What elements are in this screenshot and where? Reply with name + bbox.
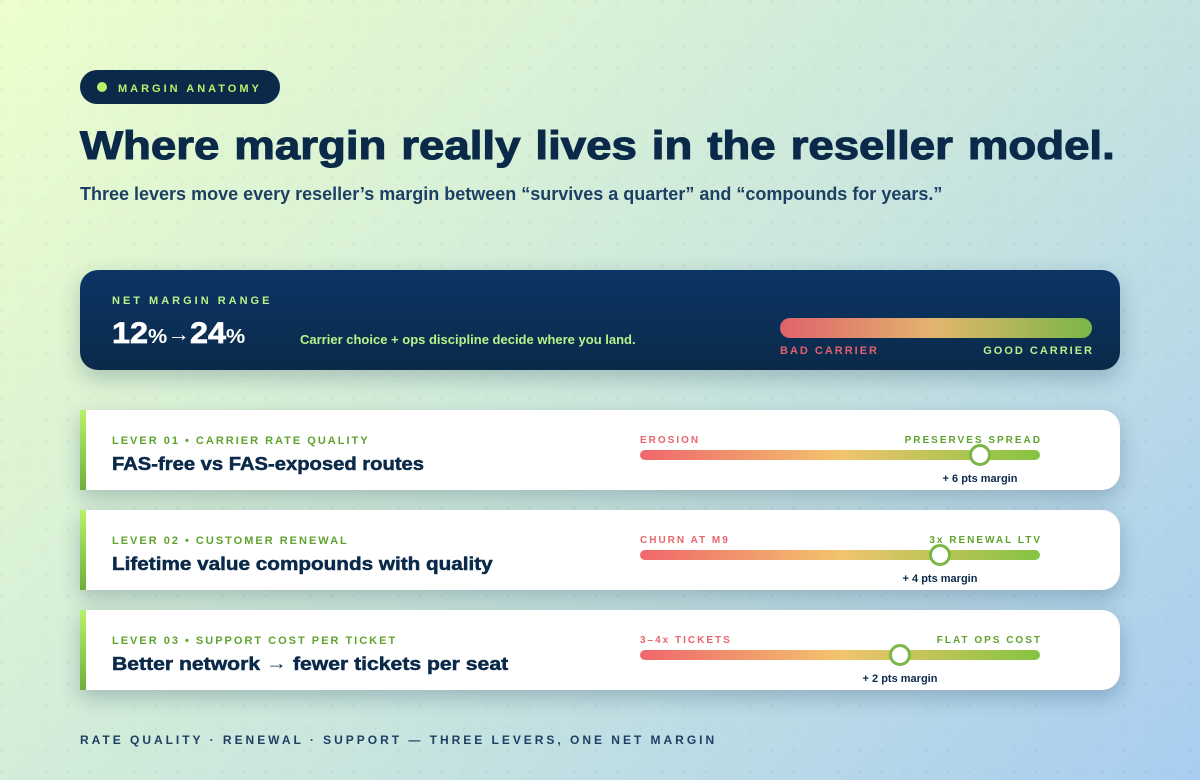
scale right label: 3x RENEWAL LTV xyxy=(929,535,1042,546)
margin gain: + 2 pts margin xyxy=(863,673,937,685)
slider track xyxy=(640,550,1040,560)
lever 03 label: LEVER 03 • SUPPORT COST PER TICKET xyxy=(112,635,397,647)
panel: lever 02 xyxy=(80,510,1120,590)
label: bad carrier: BAD CARRIER xyxy=(780,345,879,357)
badge: margin anatomy: MARGIN ANATOMY xyxy=(118,83,262,95)
subtitle: Three levers move every reseller’s margin between “survives a quarter” and “compounds for years.” xyxy=(80,184,942,204)
panel: lever 01 xyxy=(80,410,1120,490)
badge: margin anatomy xyxy=(80,70,280,104)
scale right label: FLAT OPS COST xyxy=(937,635,1042,646)
slider knob xyxy=(929,544,951,566)
gradient bar: carrier quality xyxy=(780,318,1092,338)
scale right label: PRESERVES SPREAD xyxy=(905,435,1042,446)
footer: RATE QUALITY · RENEWAL · SUPPORT — THREE LEVERS, ONE NET MARGIN xyxy=(80,733,717,747)
slider knob xyxy=(889,644,911,666)
label: good carrier: GOOD CARRIER xyxy=(983,345,1094,357)
slider knob xyxy=(969,444,991,466)
scale left label: CHURN AT M9 xyxy=(640,535,730,546)
panel: net margin range xyxy=(80,270,1120,370)
label: net margin range: NET MARGIN RANGE xyxy=(112,295,272,307)
slider track xyxy=(640,450,1040,460)
lever 02 label: LEVER 02 • CUSTOMER RENEWAL xyxy=(112,535,349,547)
range figure: 12%→24% xyxy=(112,317,245,350)
scale left label: EROSION xyxy=(640,435,700,446)
note: Carrier choice + ops discipline decide where you land. xyxy=(300,332,636,347)
lever 01 label: LEVER 01 • CARRIER RATE QUALITY xyxy=(112,435,370,447)
margin gain: + 6 pts margin xyxy=(943,473,1017,485)
lever 02 heading: Lifetime value compounds with quality xyxy=(112,554,493,574)
margin gain: + 4 pts margin xyxy=(903,573,977,585)
title: Where margin really lives in the reseller model. xyxy=(80,124,1115,168)
lever 01 heading: FAS-free vs FAS-exposed routes xyxy=(112,454,424,474)
panel: lever 03 xyxy=(80,610,1120,690)
lever 03 heading: Better network → fewer tickets per seat xyxy=(112,653,508,674)
scale left label: 3–4x TICKETS xyxy=(640,635,732,646)
slider track xyxy=(640,650,1040,660)
